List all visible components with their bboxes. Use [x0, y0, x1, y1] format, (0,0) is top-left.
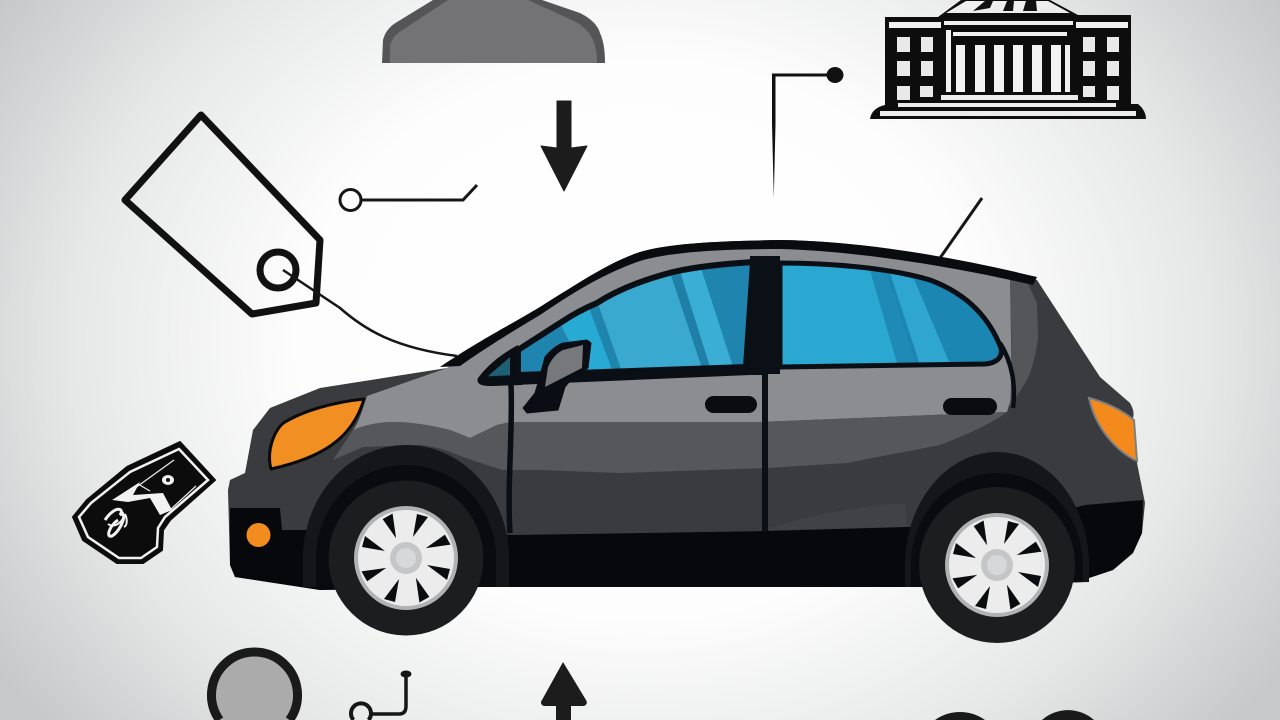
door pillar — [748, 256, 780, 531]
rear quarter highlight — [1010, 280, 1038, 407]
roof line — [440, 240, 1037, 367]
front door edge — [509, 384, 511, 533]
door handle: rear — [943, 398, 997, 415]
black sill and bumpers — [230, 500, 1143, 590]
mid tone body band — [333, 412, 1007, 473]
arrow: down towards car — [541, 101, 587, 191]
window sill front — [480, 366, 750, 386]
icon: grey dome at top — [382, 0, 605, 63]
icon: dark circles at bottom right — [935, 710, 1094, 720]
door handle: front — [705, 396, 757, 413]
headlight — [270, 399, 364, 469]
wheel: front — [328, 480, 484, 636]
connector: bottom left — [351, 670, 412, 720]
car body — [228, 240, 1145, 590]
wheel arch: front — [303, 445, 509, 587]
fog light — [246, 523, 270, 547]
upper body panel — [353, 247, 1012, 438]
wheel arch: rear — [905, 452, 1089, 587]
window: front — [518, 262, 753, 375]
icon: grey circle — [211, 652, 298, 720]
door mirror — [523, 340, 591, 413]
car — [228, 240, 1145, 643]
icon: bank building — [870, 0, 1146, 119]
antenna — [940, 198, 982, 258]
rear door edge — [1000, 343, 1014, 408]
arrow: up towards car — [541, 662, 587, 720]
tag string — [283, 270, 457, 356]
window: rear — [780, 263, 1001, 367]
lower rear door tone — [767, 503, 907, 530]
icon: money badge — [73, 442, 215, 563]
icon: price tag — [125, 115, 457, 356]
window: quarter glass — [478, 345, 522, 386]
wheel: rear — [919, 487, 1075, 643]
tail light — [1089, 398, 1137, 461]
connector: tag to car — [340, 185, 477, 210]
connector: hook line to bank — [772, 67, 844, 198]
